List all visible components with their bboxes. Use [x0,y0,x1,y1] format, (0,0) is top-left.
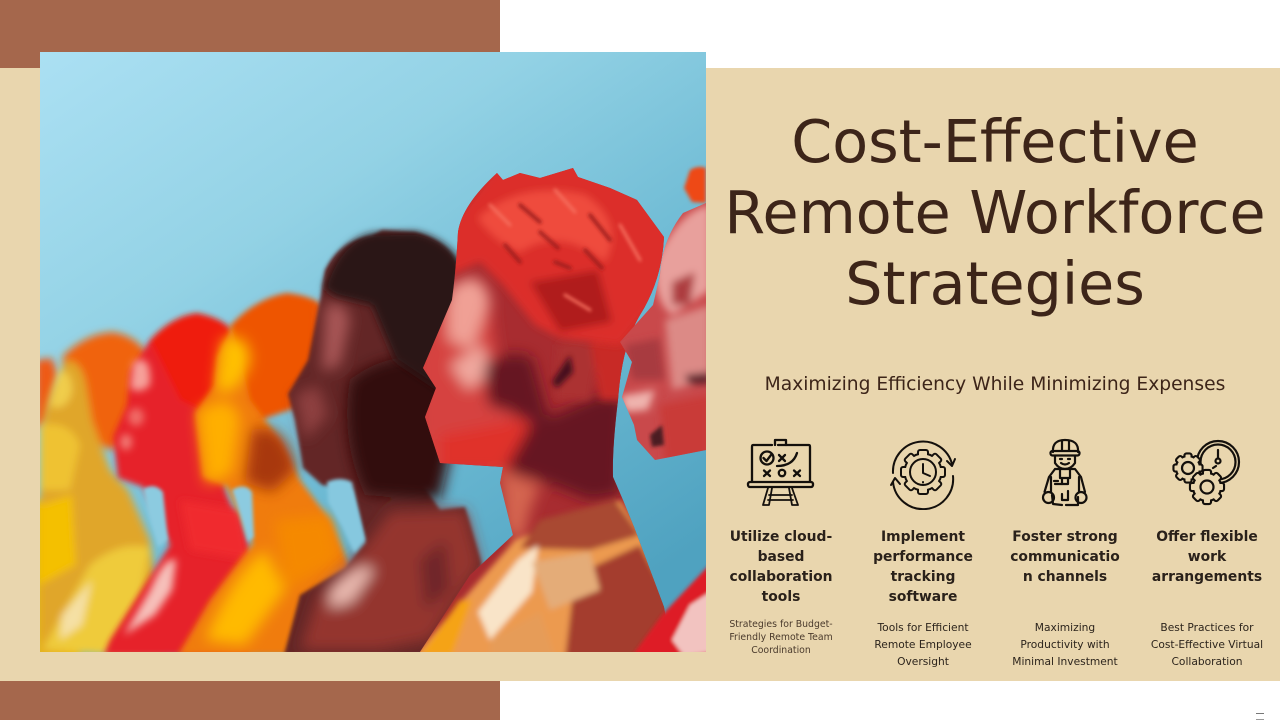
icon: worker in hard hat [1042,438,1088,506]
figure 5 shirt [420,497,665,652]
figure 2: red [104,313,252,655]
description: budget coordination: Strategies for Budget- [729,619,833,630]
figure 5: red hair [420,168,666,652]
heading: flexible work: Offer flexible [1156,528,1258,544]
figure 4 hair [324,232,462,390]
icon: gears and clock [1172,440,1240,506]
figure 3: orange [178,293,355,655]
description: oversight: Tools for Efficient [877,621,969,634]
heading: tracking software: Implement [881,528,965,544]
heading: cloud tools: based [758,549,804,565]
description: productivity: Maximizing [1035,621,1095,634]
description: oversight [874,621,972,668]
heading: tracking software: software [889,589,957,605]
figure 6 shirt [632,564,710,656]
figure 4: dark hair [284,230,482,655]
icon: performance gear clock [890,440,956,510]
heading: flexible work [1152,528,1262,585]
icon: strategy board [746,438,814,506]
title: Remote Workforce [724,179,1266,247]
heading: tracking software: performance [873,549,973,565]
hero image: row of painted profile figures [40,52,706,652]
figure 5 hair [454,168,664,345]
description: productivity: Minimal Investment [1012,655,1118,668]
figure 2 highlights [120,360,250,635]
subtitle: Maximizing Efficiency While Minimizing Expenses [765,374,1225,395]
description: virtual collaboration [1151,621,1263,668]
neck gaps showing sky [143,479,365,553]
bottom brown band [0,681,500,720]
description: oversight: Remote Employee [874,638,972,651]
heading: tracking software [873,528,973,605]
figure 5 base [420,168,665,652]
heading: flexible work: arrangements [1152,569,1262,585]
corner mark [1256,713,1264,720]
description: virtual collaboration: Cost-Effective Virtual [1151,638,1263,651]
top brown band [0,0,500,68]
far-left figure sliver [36,358,80,660]
hair strands [490,190,640,310]
description: productivity [1012,621,1118,668]
description: virtual collaboration: Best Practices for [1160,621,1254,634]
description: budget coordination: Coordination [751,645,811,656]
figure 6: right edge face [684,167,706,203]
heading: tracking software: tracking [891,569,955,585]
description: oversight: Oversight [897,655,949,668]
description: budget coordination: Friendly Remote Team [729,632,833,643]
description: virtual collaboration: Collaboration [1171,655,1243,668]
heading: communication channels [1010,528,1120,585]
figure 1: yellow [40,332,165,655]
figure 4 shading [295,303,480,650]
title [724,108,1266,318]
figure 6 base [620,203,706,460]
figure 3 highlights [198,338,340,645]
description: productivity: Productivity with [1020,638,1110,651]
title: Cost-Effective [791,108,1199,176]
description: budget coordination [729,619,833,656]
heading: cloud tools [730,528,832,605]
heading: communication channels: Foster strong [1012,528,1118,544]
heading: flexible work: work [1188,549,1226,565]
title: Strategies [845,250,1145,318]
sky background [40,52,706,652]
heading: communication channels: n channels [1023,569,1107,585]
heading: communication channels: communicatio [1010,549,1120,565]
heading: cloud tools: Utilize cloud- [730,528,832,544]
heading: cloud tools: tools [762,589,800,605]
heading: cloud tools: collaboration [730,569,832,585]
